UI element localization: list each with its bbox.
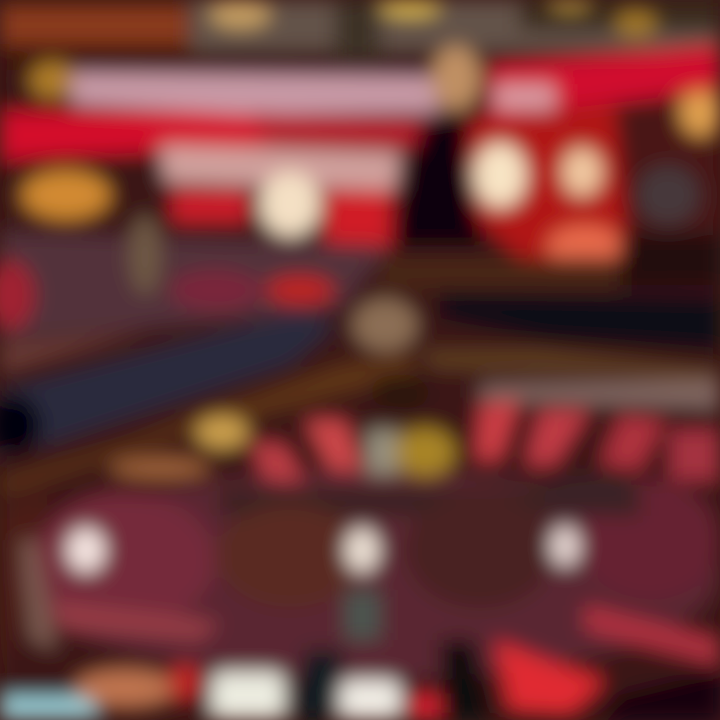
wheel segments — [110, 400, 720, 482]
right dark shape — [620, 165, 720, 285]
upper background — [0, 0, 720, 230]
dark band right — [440, 292, 720, 350]
wheel inner circle — [218, 475, 640, 640]
wooden wheel rim — [0, 299, 720, 680]
bottom pockets — [0, 640, 720, 720]
wheel body — [20, 380, 720, 680]
left mid table area — [0, 215, 620, 340]
background lights — [22, 0, 720, 219]
white wheel spots — [20, 526, 720, 665]
dark band left — [0, 312, 338, 460]
red and white banner — [0, 44, 720, 275]
dark figure — [395, 46, 482, 245]
